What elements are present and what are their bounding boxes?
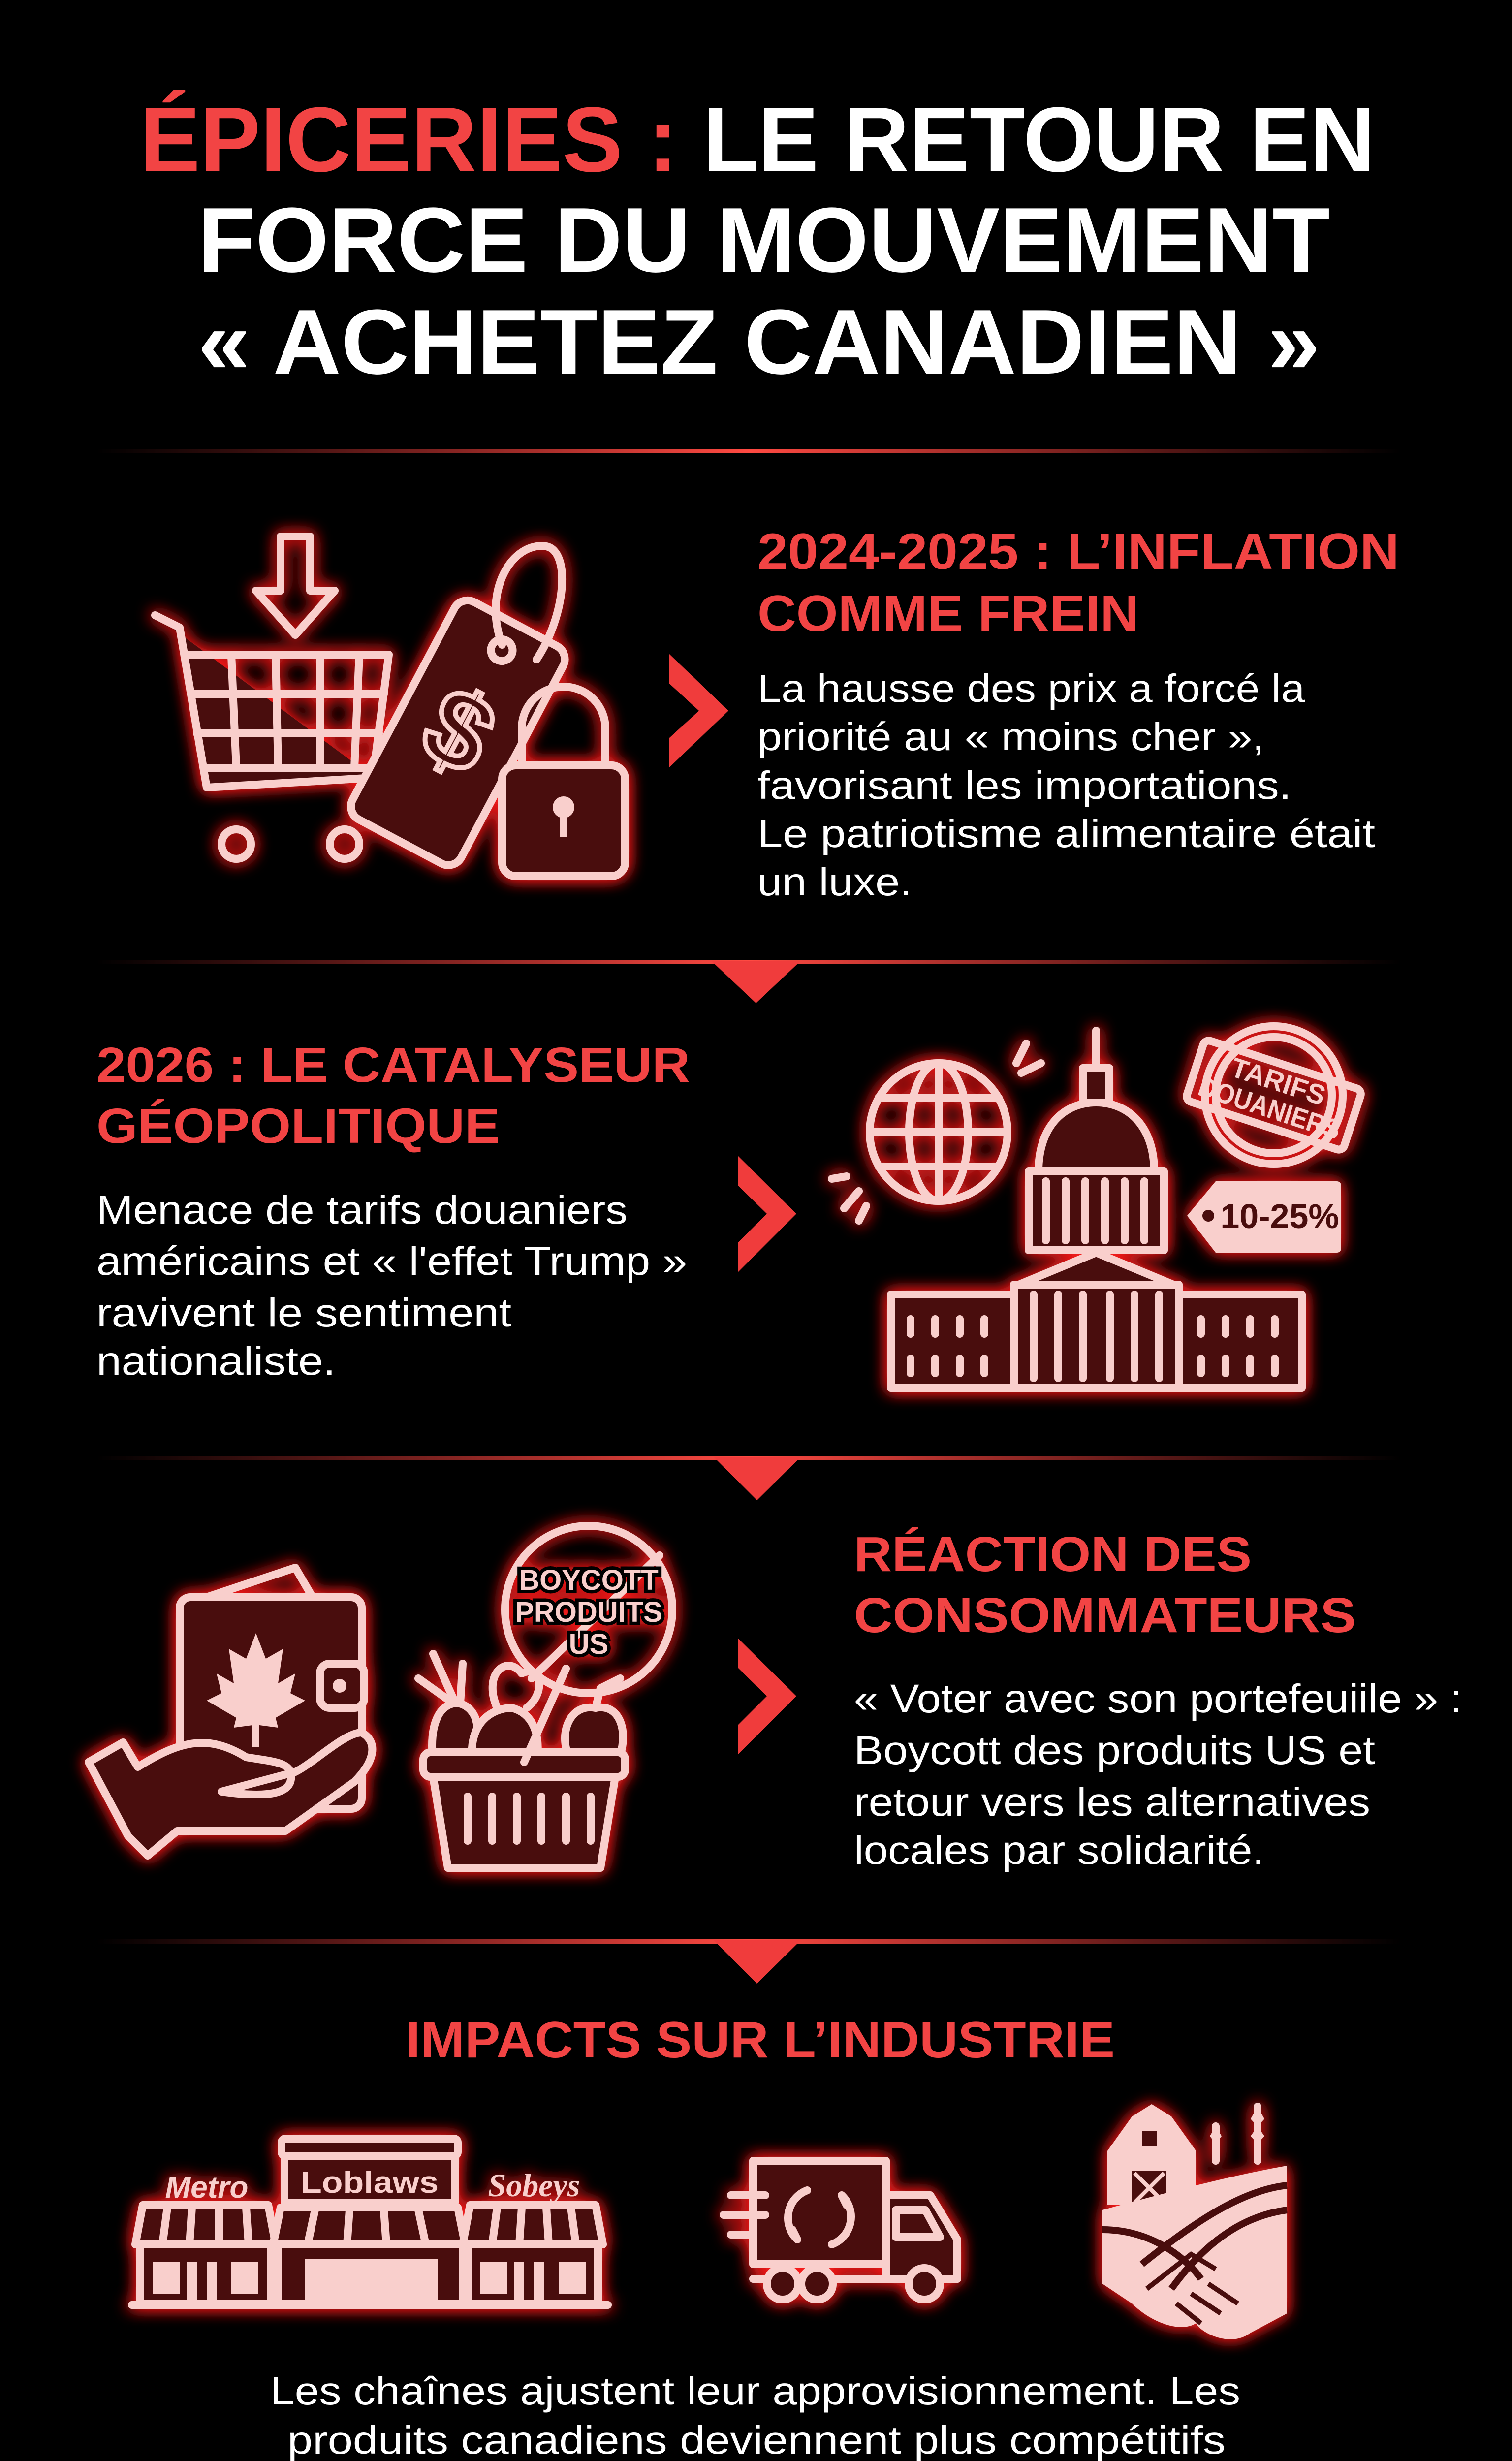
arrow: chevron section 1 (669, 654, 728, 768)
heading: section 2: GÉOPOLITIQUE (96, 1099, 500, 1154)
text: section 1 body: La hausse des prix a forcé la (757, 666, 1305, 710)
icon: globe, capitol, tariff stamp and price tag: 10-25% (1220, 1197, 1339, 1235)
text: section 3 body: retour vers les alternatives (854, 1780, 1370, 1825)
icon: wallet in hand and boycott basket: US (569, 1628, 608, 1660)
title: « ACHETEZ CANADIEN » (198, 290, 1320, 393)
icon: wallet in hand and boycott basket: BOYCOTT (519, 1564, 659, 1596)
icon: globe, capitol, tariff stamp and price tag: DOUANIERS (1195, 1071, 1345, 1145)
text: impacts body: produits canadiens deviennent plus compétitifs (287, 2418, 1226, 2461)
connector dash 1 (632, 2216, 709, 2224)
arrow: chevron section 2 (738, 1156, 796, 1272)
title (140, 88, 1375, 393)
icon: globe, capitol, tariff stamp and price tag (832, 1026, 1362, 1388)
text: section 1 body: priorité au « moins cher », (757, 715, 1264, 758)
title: ÉPICERIES : LE RETOUR EN (140, 88, 1375, 191)
heading: section 1: COMME FREIN (757, 585, 1139, 642)
text: impacts body (270, 2369, 1240, 2461)
title: FORCE DU MOUVEMENT (198, 189, 1330, 291)
heading: section 2 (96, 1038, 690, 1154)
text: section 3 body: Boycott des produits US et (854, 1728, 1375, 1773)
arrow: divider triangle 3 (714, 1940, 801, 1984)
connector dash 2 (984, 2216, 1061, 2224)
arrow: chevron section 3 (738, 1639, 796, 1754)
text: section 2 body (96, 1188, 687, 1384)
text: section 1 body (757, 666, 1375, 904)
text: section 1 body: favorisant les importations. (757, 763, 1292, 807)
icon: grocery stores Metro Loblaws Sobeys: Sobeys (488, 2168, 580, 2204)
text: section 3 body: locales par solidarité. (854, 1828, 1264, 1873)
icon: wallet in hand and boycott basket (89, 1526, 672, 1868)
arrow: divider triangle 2 (714, 1457, 801, 1500)
heading: section 1: 2024-2025 : L’INFLATION (757, 523, 1399, 580)
text: section 2 body: américains et « l'effet Trump » (96, 1239, 687, 1284)
icon: farm and handshake (1102, 2104, 1287, 2339)
text: section 3 body: « Voter avec son portefeuiile » : (854, 1676, 1462, 1721)
heading: impacts: IMPACTS SUR L’INDUSTRIE (406, 2012, 1115, 2069)
icon: globe, capitol, tariff stamp and price tag: TARIFS (1227, 1051, 1329, 1111)
arrow: divider triangle 1 (711, 961, 801, 1003)
heading: section 3: CONSOMMATEURS (854, 1588, 1356, 1643)
text: section 2 body: nationaliste. (96, 1339, 336, 1384)
text: section 1 body: un luxe. (757, 860, 912, 904)
text: section 3 body (854, 1676, 1462, 1873)
heading: section 1 (757, 523, 1399, 642)
icon: grocery stores Metro Loblaws Sobeys: Loblaws (301, 2166, 439, 2200)
text: section 2 body: Menace de tarifs douaniers (96, 1188, 628, 1232)
icon: grocery stores Metro Loblaws Sobeys: Metro (165, 2171, 248, 2205)
icon: wallet in hand and boycott basket: PRODUITS (515, 1596, 662, 1628)
icon: delivery truck (724, 2161, 957, 2300)
icon: grocery stores Metro Loblaws Sobeys (132, 2139, 608, 2305)
text: section 1 body: Le patriotisme alimentaire était (757, 812, 1375, 855)
icon: cart with price tag and lock: $ (404, 663, 514, 798)
heading: section 3: RÉACTION DES (854, 1527, 1252, 1582)
text: impacts body: Les chaînes ajustent leur approvisionnement. Les (270, 2369, 1240, 2413)
icon: cart with price tag and lock (155, 536, 625, 876)
heading: section 3 (854, 1527, 1356, 1643)
heading: section 2: 2026 : LE CATALYSEUR (96, 1038, 690, 1093)
text: section 2 body: ravivent le sentiment (96, 1291, 511, 1335)
